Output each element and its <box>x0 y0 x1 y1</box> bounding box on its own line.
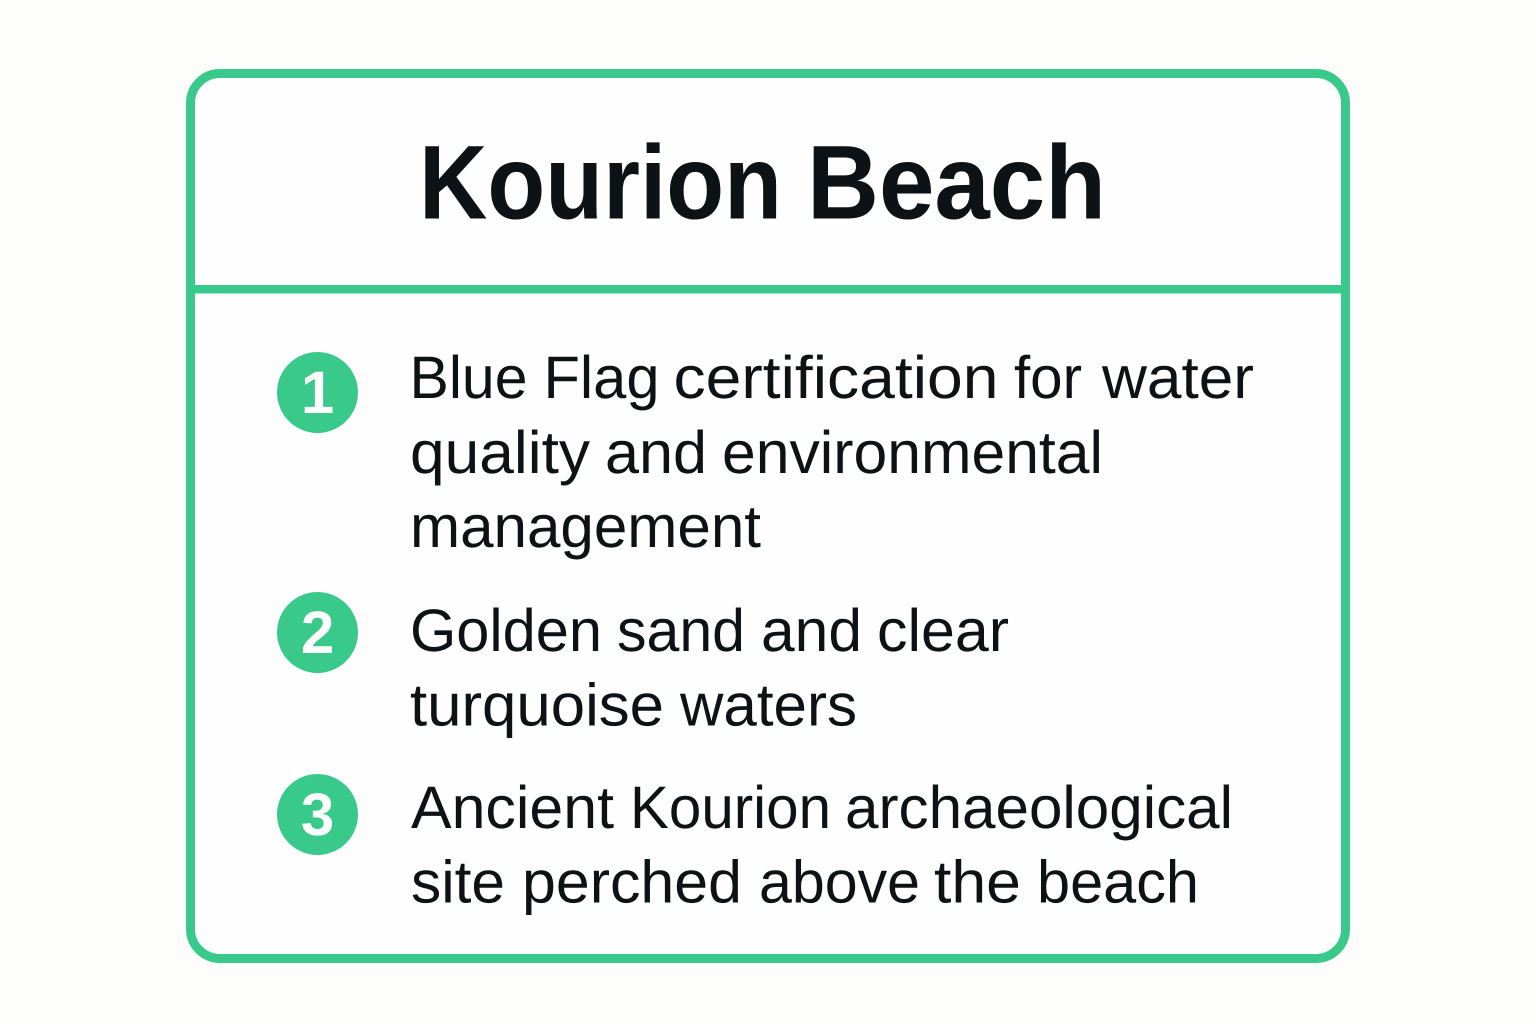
number badge 2 <box>277 592 358 673</box>
text block: item 2: sand <box>617 597 745 664</box>
text block: item 3: beach <box>1037 848 1199 916</box>
number badge 1: 1 <box>301 359 334 426</box>
title: Kourion <box>419 124 782 242</box>
text block: item 3: Kourion <box>630 774 831 841</box>
text block: item 3: above <box>759 848 920 916</box>
text block: item 1: for <box>1014 344 1082 411</box>
text block: item 3: archaeological <box>845 774 1233 841</box>
number badge 3 <box>277 774 358 855</box>
text block: item 1: management <box>410 493 761 560</box>
text block: item 3 <box>411 774 1233 916</box>
title <box>419 124 1106 242</box>
text block: item 1: Blue <box>410 344 528 411</box>
text block: item 1 <box>410 344 1254 560</box>
text block: item 1: certification <box>674 344 998 411</box>
number badge 1 <box>277 352 358 433</box>
number badge 3: 3 <box>301 781 334 848</box>
text block: item 1: water <box>1101 344 1254 411</box>
text block: item 2: and <box>761 597 862 664</box>
text block: item 3: the <box>934 848 1021 916</box>
text block: item 3: site <box>411 848 505 916</box>
text block: item 2 <box>410 597 1009 738</box>
title: Beach <box>807 124 1106 242</box>
text block: item 1: Flag <box>544 344 660 411</box>
text block: item 1: quality <box>410 419 590 486</box>
panel: Kourion Beach card <box>190 74 1346 958</box>
text block: item 2: waters <box>679 672 857 738</box>
text block: item 2: turquoise <box>410 672 664 738</box>
text block: item 2: clear <box>877 597 1009 664</box>
text block: item 3: Ancient <box>411 774 614 841</box>
number badge 2: 2 <box>301 599 334 666</box>
text block: item 1: and <box>605 419 707 486</box>
text block: item 3: perched <box>522 848 742 916</box>
text block: item 2: Golden <box>410 597 602 664</box>
text block: item 1: environmental <box>722 419 1103 486</box>
